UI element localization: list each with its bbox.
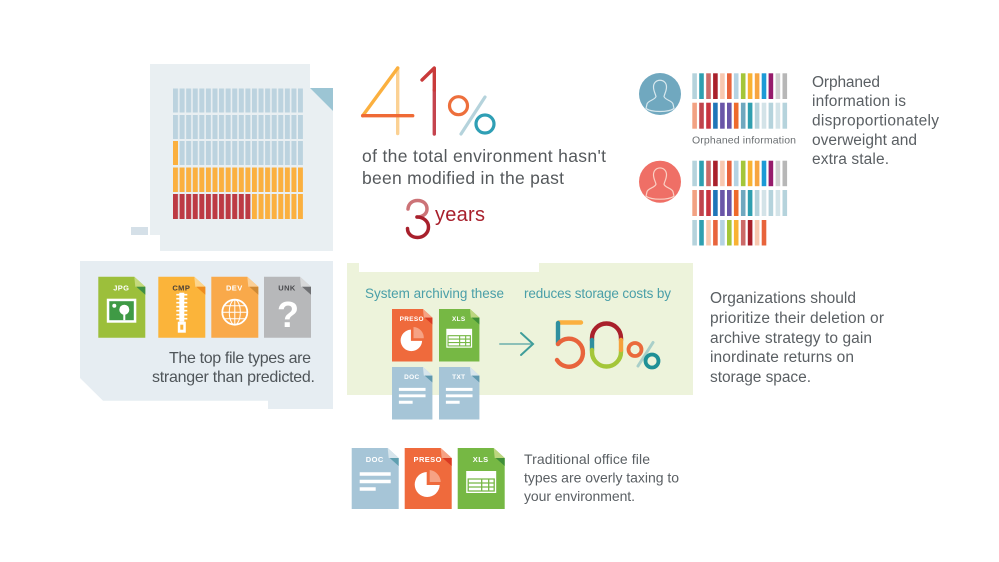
icon: CMP file bbox=[158, 277, 205, 338]
text: top file types: The top file types are bbox=[169, 350, 311, 367]
panel: top file types bbox=[80, 261, 333, 409]
icon: XLS file bbox=[439, 309, 479, 361]
big number: 41% bbox=[363, 68, 494, 134]
panel: document bar chart bbox=[131, 64, 333, 251]
icon: JPG file: JPG bbox=[113, 284, 129, 293]
icon: CMP file: CMP bbox=[172, 284, 190, 293]
icon: page fold bbox=[310, 88, 333, 111]
text: top file types bbox=[152, 350, 315, 386]
icon: DEV file bbox=[211, 277, 258, 338]
icon: UNK file: ? bbox=[277, 294, 299, 335]
icon: bottom DOC file bbox=[352, 448, 399, 509]
text: office file types note: types are overly taxing to bbox=[524, 470, 679, 486]
icon: bottom PRESO file bbox=[405, 448, 452, 509]
icon: DOC file: DOC bbox=[404, 374, 419, 381]
text: prioritize note: inordinate returns on bbox=[710, 349, 854, 366]
text: office file types note: Traditional office file bbox=[524, 451, 650, 467]
bars: red person's files bbox=[692, 161, 787, 246]
icon: TXT file: TXT bbox=[452, 374, 465, 381]
text: total environment statement: of the total environment hasn't bbox=[362, 146, 606, 166]
heading: system archiving these: System archiving these bbox=[365, 286, 504, 301]
icon: PRESO file bbox=[392, 309, 432, 361]
bar rows bbox=[173, 88, 303, 219]
text: prioritize note: prioritize their deletion or bbox=[710, 310, 884, 327]
text: total environment statement: been modified in the past bbox=[362, 168, 564, 188]
small tab bbox=[131, 227, 148, 235]
icon: bottom XLS file: XLS bbox=[473, 455, 489, 464]
icon: JPG file bbox=[98, 277, 145, 338]
icon: bottom XLS file bbox=[458, 448, 505, 509]
arrow bbox=[500, 333, 533, 355]
label: orphaned information: Orphaned information bbox=[692, 134, 796, 146]
text: orphaned information note: disproportionately bbox=[812, 112, 939, 130]
icon: DEV file: DEV bbox=[226, 284, 243, 293]
panel: system archiving bbox=[347, 263, 693, 419]
text: prioritize note bbox=[710, 290, 884, 386]
big number: 50% bbox=[557, 322, 658, 368]
icon: TXT file bbox=[439, 367, 479, 419]
text: orphaned information note: extra stale. bbox=[812, 151, 889, 168]
text: total environment statement bbox=[362, 146, 606, 188]
big number: 3 years bbox=[408, 200, 485, 238]
bars: blue person's files bbox=[692, 73, 787, 129]
text: orphaned information note bbox=[812, 74, 939, 168]
text: prioritize note: Organizations should bbox=[710, 290, 856, 307]
icon: XLS file: XLS bbox=[452, 316, 466, 323]
icon: bottom PRESO file: PRESO bbox=[414, 455, 442, 464]
text: orphaned information note: overweight and bbox=[812, 132, 917, 149]
heading: reduces storage costs by: reduces storage costs by bbox=[524, 286, 671, 301]
icon: DOC file bbox=[392, 367, 432, 419]
text: office file types note: your environment. bbox=[524, 488, 635, 504]
text: orphaned information note: Orphaned bbox=[812, 74, 880, 91]
icon: UNK file: UNK bbox=[278, 284, 296, 293]
text: prioritize note: storage space. bbox=[710, 369, 811, 386]
text: top file types: stranger than predicted. bbox=[152, 369, 315, 386]
text: prioritize note: archive strategy to gain bbox=[710, 330, 872, 347]
icon: bottom DOC file: DOC bbox=[366, 455, 384, 464]
icon: PRESO file: PRESO bbox=[400, 316, 424, 323]
text: orphaned information note: information is bbox=[812, 93, 906, 110]
text: office file types note bbox=[524, 451, 679, 504]
icon: blue person bbox=[639, 73, 681, 115]
big number: 3 years: years bbox=[435, 204, 485, 226]
icon: UNK file bbox=[264, 277, 311, 338]
icon: red person bbox=[639, 161, 681, 203]
